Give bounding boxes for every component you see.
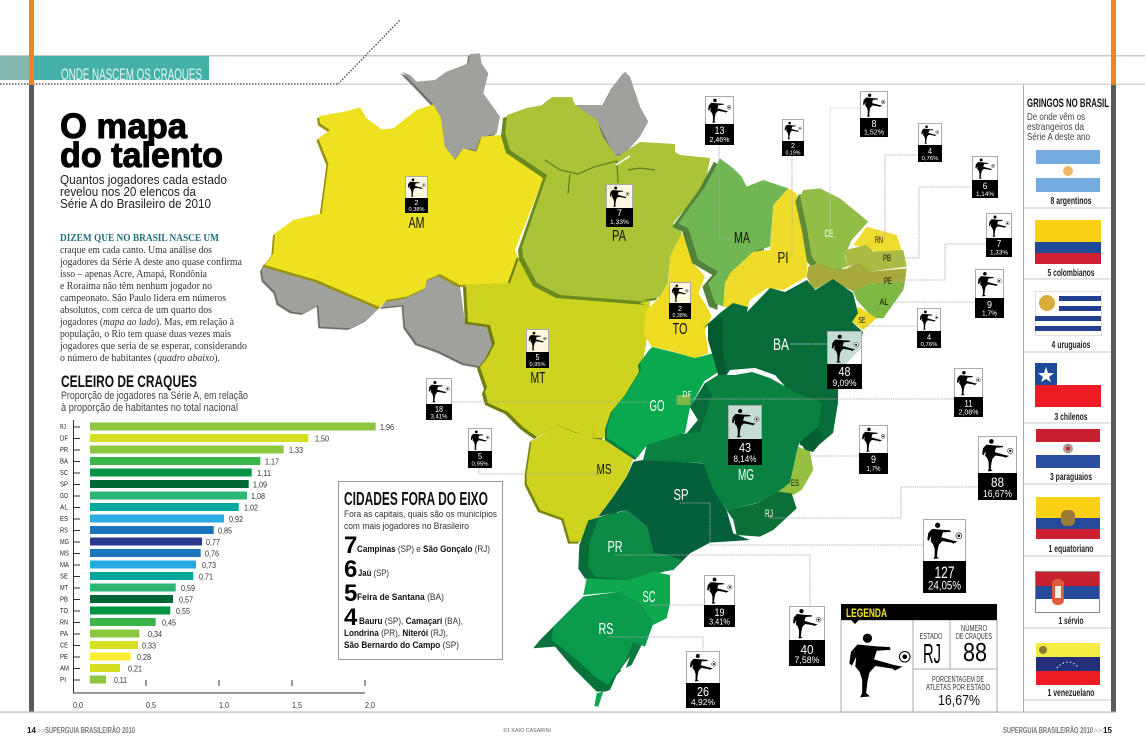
state labels: MT <box>530 370 546 387</box>
callout: PA: 7 <box>617 208 622 218</box>
callout: CE: 1,52% <box>864 130 884 136</box>
bar chart: SC <box>60 468 68 477</box>
state: Sao Paulo <box>598 460 750 570</box>
state: Amazonas <box>265 104 545 307</box>
state: Pernambuco <box>807 262 907 292</box>
flag: Colombia <box>1035 220 1101 264</box>
bar chart: MA <box>60 560 69 569</box>
callout: BA: 9,09% <box>832 378 856 388</box>
bar chart: 0,28 <box>137 653 151 662</box>
bar chart: 0,34 <box>148 630 162 639</box>
panel: gringos no brasil: 8 argentinos <box>1050 196 1092 207</box>
callout: PR: 40 <box>800 642 814 657</box>
callout: MG: 43 <box>739 440 751 455</box>
bar chart: 0,11 <box>114 676 127 685</box>
flag: Ecuador <box>1036 497 1100 539</box>
callout: SP: 127 <box>934 563 954 582</box>
panel: cidades fora do eixo: Feira de Santana (BA) <box>357 592 444 603</box>
bar chart: RN <box>60 618 68 626</box>
panel: gringos no brasil: 1 sérvio <box>1058 616 1084 627</box>
bar chart: DF <box>60 434 68 442</box>
state: Para <box>505 97 710 302</box>
callout: CE: 8 <box>872 119 877 130</box>
rivers of Para <box>545 156 655 194</box>
intro text: jogadores da Série A deste ano quase confirma <box>59 257 242 268</box>
callout: DF <box>954 368 983 417</box>
bar chart: 1,33 <box>289 446 303 455</box>
state: Tocantins <box>643 233 712 358</box>
panel: gringos no brasil: estrangeiros da <box>1027 122 1084 133</box>
callout: RN: 4 <box>928 147 932 156</box>
callout: AM: 0,38% <box>408 207 425 213</box>
chart heading: Proporção de jogadores na Série A, em relação <box>61 390 248 402</box>
callout: TO: 0,38% <box>672 313 688 319</box>
callout: AM: 2 <box>414 200 419 207</box>
callout: MT <box>526 330 549 368</box>
callout: PB: 6 <box>983 181 987 191</box>
bar chart: PI <box>60 675 66 684</box>
callout: PB: 1,14% <box>976 192 995 198</box>
title: do talento <box>60 136 223 175</box>
panel: gringos no brasil <box>1024 85 1111 712</box>
footer: SUPERGUIA BRASILEIRÃO 2010 <box>45 726 135 735</box>
bar chart: 0,73 <box>202 561 216 570</box>
state labels: RS <box>598 621 614 638</box>
bar chart: 1,11 <box>257 469 272 478</box>
chart heading: CELEIRO DE CRAQUES <box>61 372 197 391</box>
state: Rio Grande do Norte <box>853 227 902 252</box>
bar chart: SP <box>60 480 68 488</box>
panel: gringos no brasil: 1 venezuelano <box>1048 688 1094 699</box>
section band: ONDE NASCEM OS CRAQUES <box>61 65 202 84</box>
bar chart: 1,50 <box>315 434 329 444</box>
intro text: o número de habitantes (quadro abaixo). <box>60 353 220 364</box>
intro text <box>59 232 247 364</box>
bar chart: 0,45 <box>162 618 176 628</box>
callout: PE: 7 <box>997 239 1002 250</box>
panel: legenda: ATLETAS POR ESTADO <box>926 683 990 692</box>
panel: gringos no brasil: 3 paraguaios <box>1050 472 1092 483</box>
subtitle: Quantos jogadores cada estado <box>60 172 227 187</box>
bar chart: 0,5 <box>146 701 156 710</box>
callout: DF: 2,08% <box>958 408 979 416</box>
state: Minas Gerais <box>643 372 823 510</box>
callout: AL <box>975 270 1004 318</box>
bar chart: 1,96 <box>380 423 394 432</box>
panel: legenda: RJ <box>923 638 941 669</box>
callout: PA <box>606 184 633 227</box>
bar chart: PB <box>60 594 68 604</box>
state labels: TO <box>672 321 688 338</box>
callout: ES: 9 <box>871 454 876 466</box>
bar chart: 0,77 <box>206 538 220 547</box>
state: Goias <box>607 347 720 458</box>
bar chart: MG <box>60 537 69 546</box>
bar chart: AM <box>60 664 69 672</box>
bar chart: PE <box>60 652 68 661</box>
state: Rio de Janeiro <box>727 492 797 537</box>
callout: ES: 1,7% <box>866 466 880 473</box>
intro text: e Roraima não têm nenhum jogador no <box>60 281 212 292</box>
callout: DF: 11 <box>964 399 973 410</box>
panel: gringos no brasil: 5 colombianos <box>1048 268 1095 279</box>
state: Rondonia <box>382 273 495 367</box>
callout: RJ <box>978 436 1017 500</box>
panel: cidades fora do eixo: Campinas (SP) e São Gonçalo (RJ) <box>357 544 490 555</box>
state: Ceara <box>800 188 868 270</box>
title: O mapa <box>60 107 188 146</box>
state labels: ES <box>791 478 799 488</box>
panel: cidades fora do eixo: Londrina (PR), Niterói (RJ), <box>344 628 448 639</box>
state labels: SC <box>642 589 656 606</box>
callout: ES <box>859 426 888 474</box>
bar chart: MT <box>60 583 68 592</box>
callout: MA: 2,46% <box>710 137 730 144</box>
footer: 14 <box>27 726 36 735</box>
bar chart: TO <box>60 606 68 615</box>
bar chart: 1,09 <box>253 480 267 490</box>
callout: RJ: 88 <box>991 474 1004 490</box>
panel: cidades fora do eixo: CIDADES FORA DO EIXO <box>344 489 488 509</box>
callout: RS: 4,92% <box>691 697 715 707</box>
flag: Argentina <box>1036 150 1100 192</box>
state labels: CE <box>824 228 834 240</box>
callout: SE: 4 <box>927 333 931 342</box>
bar chart: 0,21 <box>128 664 142 674</box>
panel: gringos no brasil: 4 uruguaios <box>1052 340 1091 351</box>
callout: SC: 19 <box>714 607 724 619</box>
state labels: PR <box>608 539 622 556</box>
bar chart: 0,57 <box>179 596 193 604</box>
callout: SP <box>923 520 966 593</box>
callout: SE <box>917 308 941 348</box>
callout: GO: 3,41% <box>430 414 448 420</box>
callout: AM <box>405 176 428 213</box>
bar chart: 0,76 <box>205 550 219 558</box>
callout: SC: 3,41% <box>709 618 730 626</box>
panel: gringos no brasil: 1 equatoriano <box>1048 544 1094 555</box>
callout: AL: 1,7% <box>982 308 997 318</box>
leader lines <box>452 108 986 651</box>
intro text: jogadores que seria de se esperar, considerando <box>59 341 247 352</box>
panel: gringos no brasil: Série A deste ano <box>1027 132 1090 143</box>
callout: MG: 8,14% <box>734 454 756 464</box>
bar chart: PR <box>60 445 68 454</box>
intro text: população, o Rio tem quase duas vezes mais <box>60 329 231 340</box>
state: Acre <box>262 263 380 328</box>
bar chart: 1,0 <box>219 701 229 710</box>
callout: MS: 5 <box>478 452 482 461</box>
state: Sergipe <box>852 307 877 330</box>
panel: cidades fora do eixo: Fora as capitais, quais são os municípios <box>344 509 497 520</box>
panel: cidades fora do eixo: 7 <box>344 532 357 559</box>
callout: SC <box>704 576 735 627</box>
state labels: AL <box>880 297 888 308</box>
panel: cidades fora do eixo: com mais jogadores no Brasileiro <box>344 521 469 532</box>
state: Espirito Santo <box>778 447 813 495</box>
state labels: MA <box>734 230 750 247</box>
intro text: jogadores (mapa ao lado). Mas, em relação à <box>59 317 234 328</box>
callout: MT: 5 <box>536 353 540 362</box>
bar chart: GO <box>60 491 68 500</box>
state labels: MG <box>738 467 754 484</box>
subtitle: Série A do Brasileiro de 2010 <box>60 196 211 211</box>
state: Mato Grosso <box>466 255 650 438</box>
callout: MG <box>728 406 762 465</box>
callout: BA <box>827 332 862 389</box>
panel: cidades fora do eixo: Jaú (SP) <box>358 568 389 579</box>
footer: ©1 KAIO CASARINI <box>503 727 551 734</box>
callout: PA: 1,33% <box>610 219 629 226</box>
callout: MA: 13 <box>714 125 724 137</box>
state: Amapa <box>575 72 648 155</box>
subtitle: revelou nos 20 elencos da <box>60 184 197 199</box>
callout: MS: 0,95% <box>472 462 489 468</box>
state labels <box>408 215 892 638</box>
panel: cidades fora do eixo: 5 <box>344 580 357 607</box>
panel: cidades fora do eixo: 4 <box>344 604 358 631</box>
state labels: PA <box>612 228 626 245</box>
callout: PE <box>986 214 1012 257</box>
callout: MA <box>705 96 734 145</box>
state: Parana <box>588 510 682 580</box>
panel: legenda <box>841 604 997 712</box>
panel: legenda: 88 <box>963 637 987 667</box>
flag: Uruguay <box>1035 292 1102 336</box>
state labels: BA <box>773 335 789 354</box>
bar chart: 0,71 <box>199 572 213 582</box>
intro text: campeonato. São Paulo lidera em números <box>60 293 226 304</box>
state: Maranhao <box>678 158 788 307</box>
bar chart: RJ <box>60 422 66 431</box>
panel: cidades fora do eixo: São Bernardo do Campo (SP) <box>344 640 459 651</box>
dotted header rule <box>0 20 1145 85</box>
flag: Venezuela <box>1036 643 1100 685</box>
callout: PR <box>789 606 825 666</box>
state labels: PI <box>778 250 788 267</box>
bar chart: RS <box>60 526 68 534</box>
state labels: DF <box>682 389 692 399</box>
flag: Chile <box>1035 363 1101 407</box>
state: Alagoas <box>853 282 905 318</box>
bar chart: AL <box>60 502 68 512</box>
state: Rio Grande do Sul <box>533 592 653 692</box>
intro text: DIZEM QUE NO BRASIL NASCE UM <box>60 232 220 244</box>
state: Santa Catarina <box>583 572 670 625</box>
callout: GO <box>426 378 452 420</box>
panel: legenda: NÚMERO <box>961 624 987 633</box>
intro text: craque em cada canto. Uma análise dos <box>60 245 212 256</box>
callout: GO: 18 <box>435 405 443 414</box>
callout: PI <box>782 120 804 156</box>
bar chart: 0,33 <box>142 642 156 650</box>
footer: 15 <box>1103 726 1112 735</box>
state: Paraiba <box>845 245 907 272</box>
intro text: isso – apenas Acre, Amapá, Rondônia <box>60 269 207 280</box>
callout: BA: 48 <box>838 364 850 379</box>
panel: legenda: 16,67% <box>938 692 980 709</box>
callout: RS <box>686 652 720 708</box>
state: Distrito Federal <box>677 395 691 405</box>
callout: SE: 0,76% <box>920 342 938 348</box>
state: Roraima <box>402 53 500 160</box>
panel: legenda: DE CRAQUES <box>956 632 992 641</box>
callout: CE <box>860 92 888 137</box>
callout: PB <box>972 156 998 198</box>
callout: RN <box>918 124 942 162</box>
flag: Paraguay <box>1036 429 1100 468</box>
top rule <box>0 55 1145 56</box>
callout: SP: 24,05% <box>928 580 961 592</box>
bar chart: 0,55 <box>176 607 190 616</box>
panel: cidades fora do eixo: Bauru (SP), Camaçari (BA), <box>359 616 463 627</box>
state: Mato Grosso do Sul <box>527 425 633 542</box>
bar chart: 0,92 <box>229 515 243 524</box>
state labels: RJ <box>765 508 773 520</box>
bar chart: 0,0 <box>73 701 83 710</box>
callout: PI: 0,19% <box>786 150 801 156</box>
bar chart: CE <box>60 640 68 650</box>
state labels: SE <box>858 315 866 325</box>
callout: TO <box>669 282 691 319</box>
state labels: MS <box>596 461 612 478</box>
bar chart: 1,17 <box>265 458 279 466</box>
bar chart: 2,0 <box>365 701 375 710</box>
bar chart: 1,5 <box>292 701 302 710</box>
subtitle <box>60 172 227 211</box>
callout: RS: 26 <box>697 685 709 699</box>
callout: MS <box>468 428 492 468</box>
state labels: GO <box>650 398 664 415</box>
chart heading: à proporção de habitantes no total nacional <box>61 402 238 414</box>
intro text: absolutos, com cerca de um quarto dos <box>60 305 212 316</box>
callout: MT: 0,95% <box>530 362 546 368</box>
callout: PI: 2 <box>791 141 795 150</box>
state labels: SP <box>674 487 688 504</box>
state labels: PE <box>884 276 892 287</box>
callout: PE: 1,33% <box>990 250 1008 256</box>
panel: cidades fora do eixo <box>338 482 502 660</box>
Lagoa dos Patos <box>594 642 642 707</box>
panel: legenda: ESTADO <box>920 632 942 641</box>
panel: legenda: PORCENTAGEM DE <box>932 675 984 684</box>
bar chart: MS <box>60 548 69 558</box>
state labels: AM <box>408 215 424 232</box>
state: Bahia <box>703 279 863 450</box>
bar chart: BA <box>60 456 68 466</box>
panel: cidades fora do eixo: 6 <box>344 556 357 583</box>
map of Brazil <box>262 53 907 707</box>
state labels: PB <box>883 253 891 263</box>
panel: gringos no brasil: 3 chilenos <box>1054 412 1088 423</box>
bar chart: 1,08 <box>251 492 265 501</box>
bar chart: 0,59 <box>181 584 195 593</box>
bar chart: ES <box>60 514 68 523</box>
footer <box>27 726 1112 735</box>
flag: Serbia <box>1036 572 1100 612</box>
callout: RN: 0,76% <box>922 156 939 162</box>
callout: PR: 7,58% <box>794 655 820 665</box>
bar chart: SE <box>60 572 68 580</box>
panel: gringos no brasil: De onde vêm os <box>1027 112 1085 123</box>
bar chart <box>60 420 394 710</box>
panel: legenda: LEGENDA <box>846 606 887 620</box>
title <box>60 107 223 175</box>
state: Piaui <box>723 188 808 312</box>
footer: >> <box>1094 728 1102 735</box>
callout: RJ: 16,67% <box>983 489 1012 500</box>
footer: >> <box>37 728 45 735</box>
section band <box>0 56 209 84</box>
bar chart: 1,02 <box>244 504 258 512</box>
footer: SUPERGUIA BRASILEIRÃO 2010 <box>1003 726 1093 735</box>
callout: AL: 9 <box>987 299 992 311</box>
bar chart: 0,85 <box>218 526 232 536</box>
bar chart: PA <box>60 629 68 638</box>
state labels: RN <box>875 235 883 245</box>
chart heading <box>61 372 248 414</box>
callout: TO: 2 <box>678 306 682 313</box>
